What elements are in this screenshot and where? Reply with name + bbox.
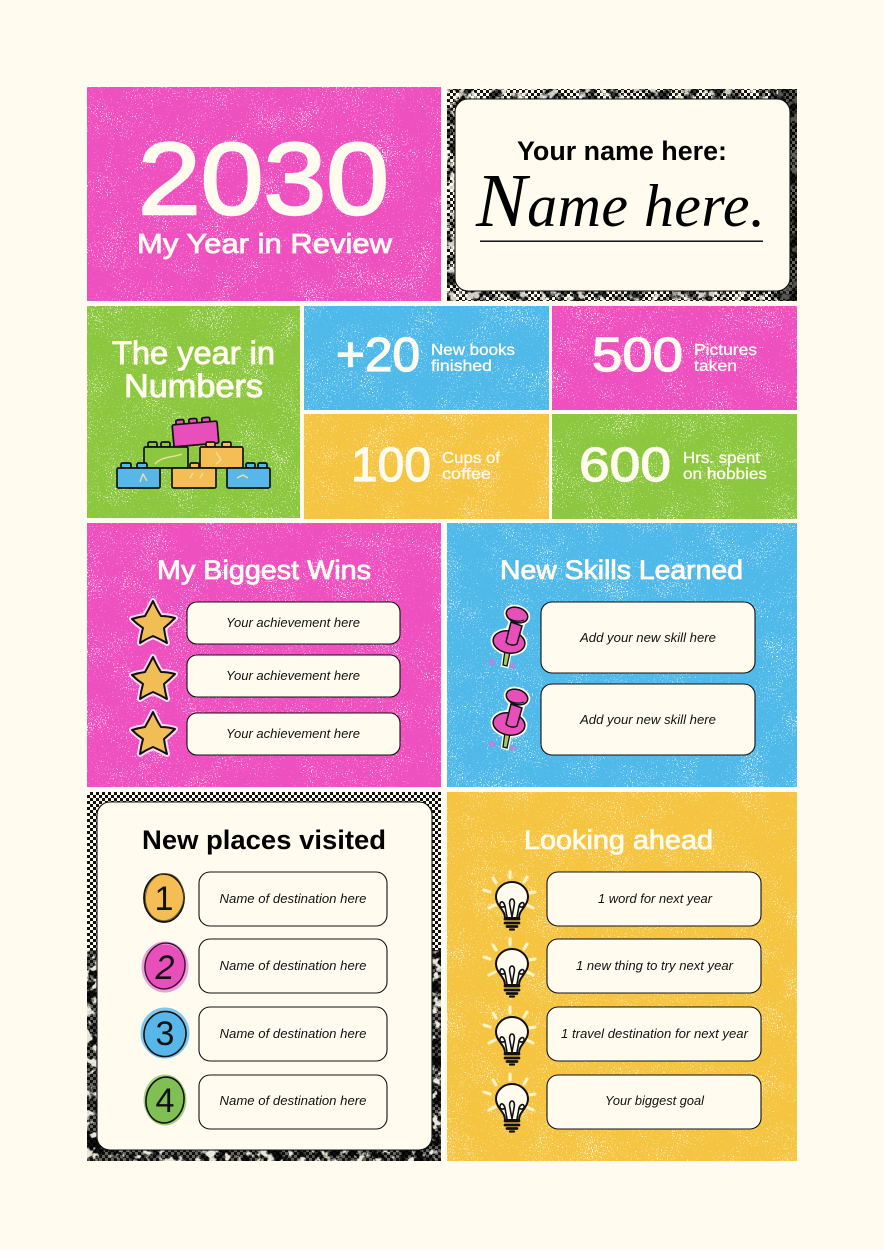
achievement row: Your achievement here [226,615,360,630]
icon: toy blocks [117,417,270,488]
plan row [547,1007,761,1061]
stat: books: finished [431,358,492,375]
number badge 2 [141,940,189,992]
achievement row [187,655,400,697]
name underline [480,240,763,242]
number badge 3 [141,1009,189,1059]
destination row [199,1075,387,1129]
icon: light bulb [484,1074,535,1132]
number badge 2: 2 [155,949,175,987]
number badge 1 [143,871,187,923]
icon: push pin [488,686,530,751]
icon: light bulb [484,939,535,996]
heading: My Biggest Wins [157,555,371,585]
number badge 4: 4 [156,1082,174,1120]
stat: books: +20 [336,329,420,382]
panel: name card [447,89,797,301]
stat: coffee: 100 [351,439,431,492]
stat: books: New books [431,342,515,359]
skill row: Add your new skill here [579,712,716,727]
stat: pictures: Pictures [694,342,757,359]
heading [112,335,275,404]
destination row: Name of destination here [220,958,366,973]
plan row [547,939,761,993]
plan row: 1 travel destination for next year [561,1026,749,1041]
icon: push pin [488,604,530,669]
heading: Looking ahead [524,825,713,855]
panel: the year in numbers [87,306,300,518]
icon: star [132,712,175,754]
plan row: Your biggest goal [605,1093,705,1108]
stat: hobbies: 600 [579,439,671,492]
heading: New places visited [142,825,386,855]
name label: Your name here: [517,136,727,166]
stat: hobbies [552,414,797,519]
stat: pictures [552,306,797,410]
number badge 1: 1 [155,880,173,918]
heading: The year in [112,335,275,371]
stat: coffee [304,414,549,519]
skill row: Add your new skill here [579,630,716,645]
stat: coffee: coffee [442,466,491,483]
destination row: Name of destination here [220,891,366,906]
icon: star [132,657,175,699]
destination row [199,939,387,993]
panel: my biggest wins [87,523,441,787]
achievement row [187,602,400,644]
plan row: 1 word for next year [598,891,713,906]
stat: books [304,306,549,410]
stat: pictures: taken [694,358,737,375]
stat: pictures: 500 [592,329,683,382]
plan row [547,872,761,926]
number badge 4 [143,1075,187,1125]
plan row [547,1075,761,1129]
panel: new places visited [87,792,441,1161]
achievement row: Your achievement here [226,726,360,741]
plan row: 1 new thing to try next year [576,958,734,973]
achievement row: Your achievement here [226,668,360,683]
destination row [199,872,387,926]
number badge 3: 3 [156,1015,174,1053]
stat: hobbies: on hobbies [683,466,767,483]
heading: Numbers [124,368,263,404]
panel: looking ahead [447,792,797,1161]
subtitle: My Year in Review [137,228,393,259]
panel: new skills learned [447,523,797,787]
destination row [199,1007,387,1061]
icon: star [132,601,175,643]
icon: light bulb [484,1007,535,1064]
achievement row [187,713,400,755]
stat: hobbies: Hrs. spent [683,450,761,467]
destination row: Name of destination here [220,1026,366,1041]
stat: coffee: Cups of [442,450,501,467]
panel: title [87,87,441,301]
skill row [541,684,755,755]
heading: New Skills Learned [500,555,743,585]
icon: light bulb [484,872,535,930]
skill row [541,602,755,673]
year heading: 2030 [138,122,389,236]
script name: Name here. [475,159,765,243]
destination row: Name of destination here [220,1093,366,1108]
